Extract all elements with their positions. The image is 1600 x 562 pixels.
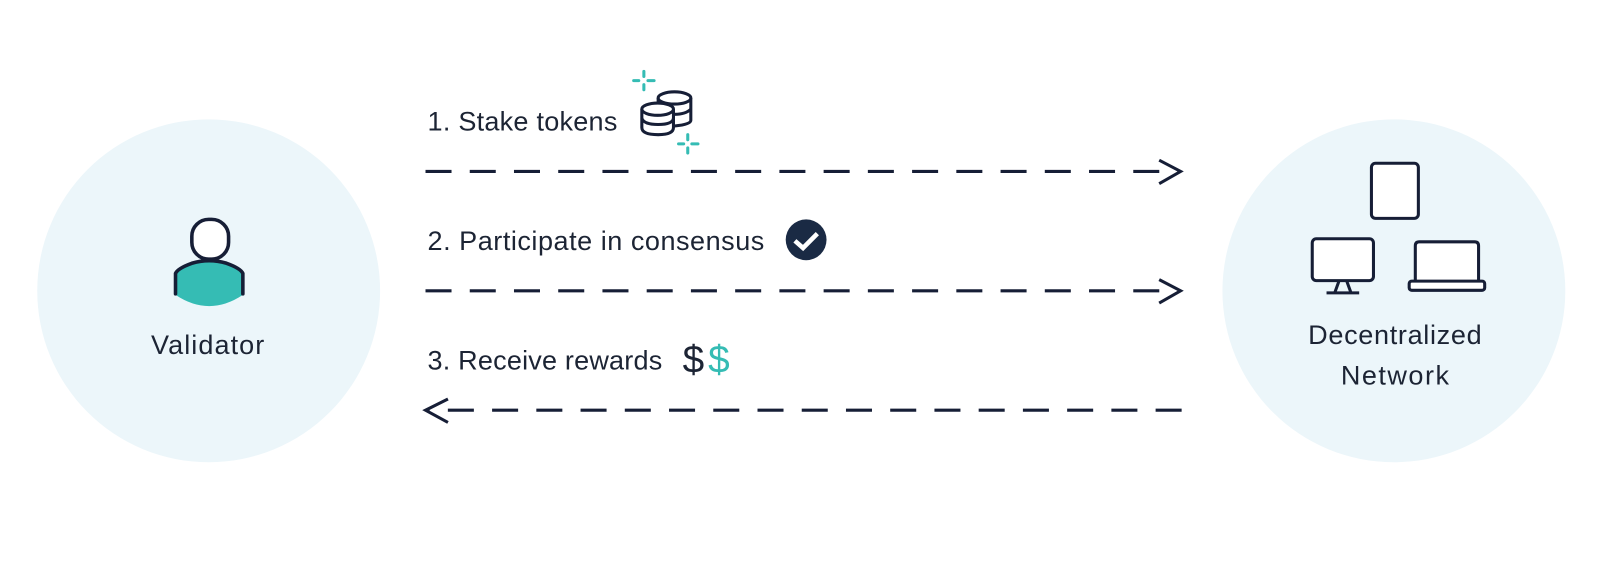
- icon: validator person: [176, 219, 243, 306]
- step 1 label: 1. Stake tokens: [428, 107, 617, 137]
- icon: sparkle bottom: [679, 135, 698, 153]
- arrow 3: to validator: [426, 399, 1182, 422]
- step 3 label: 3. Receive rewards: [428, 345, 662, 375]
- icon: dollar signs: $: [708, 338, 730, 381]
- label: validator: Validator: [151, 330, 264, 360]
- arrow 2: to network: [426, 280, 1181, 303]
- label: decentralized network: Network: [1341, 361, 1449, 391]
- label: decentralized network: Decentralized: [1308, 320, 1482, 350]
- label: decentralized network: [1308, 320, 1482, 391]
- arrow 1: to network: [426, 160, 1181, 184]
- icon: laptop: [1409, 242, 1485, 290]
- panel: decentralized network: [1222, 119, 1565, 462]
- icon: dollar signs: [683, 338, 730, 381]
- step 2 label: 2. Participate in consensus: [428, 226, 764, 256]
- icon: dollar signs: $: [683, 338, 704, 381]
- icon: sparkle top: [634, 71, 654, 90]
- panel: validator: [37, 119, 380, 462]
- icon: coins: [642, 92, 691, 135]
- icon: tablet: [1371, 163, 1418, 218]
- icon: check badge: [786, 219, 827, 260]
- icon: desktop monitor: [1312, 239, 1373, 293]
